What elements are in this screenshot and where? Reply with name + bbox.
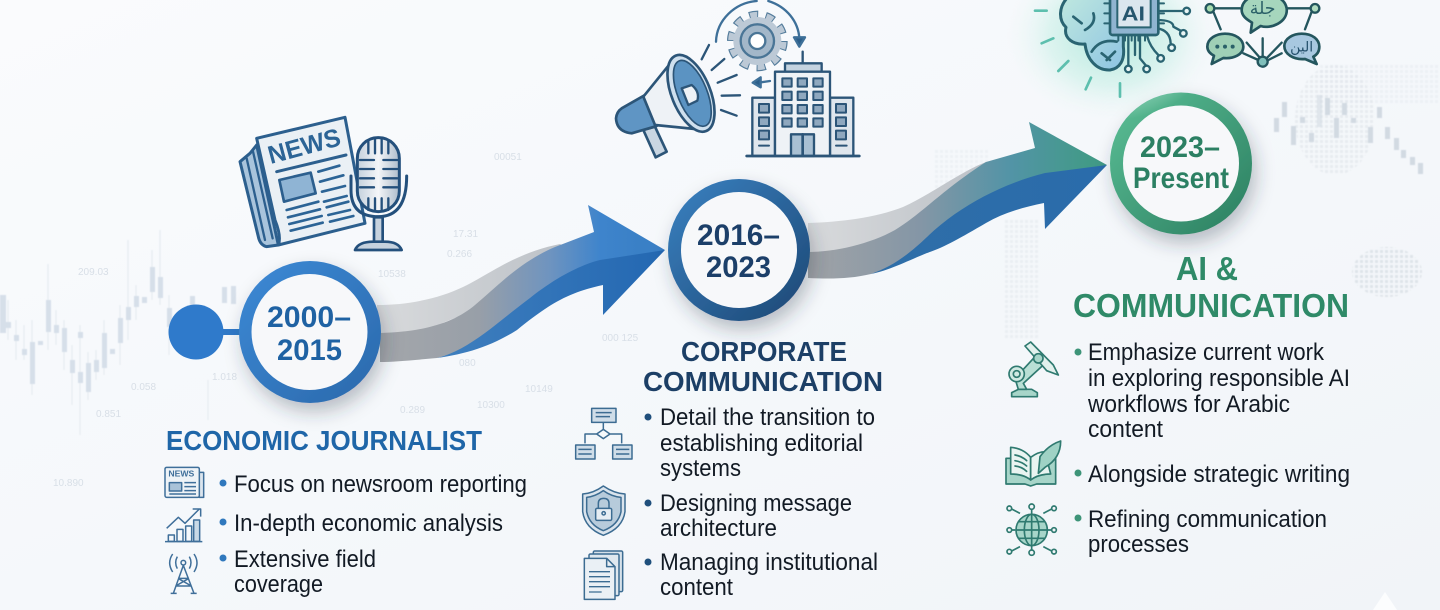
icon: document stack (584, 551, 623, 599)
icon: glow rays (1035, 11, 1120, 97)
icon: news page (165, 467, 204, 497)
icon: cycle arrows (716, 1, 805, 87)
icon: robot arm with pen (1009, 342, 1058, 397)
icon: news page: NEWS (168, 470, 195, 479)
heading: AI and communication: COMMUNICATION (1073, 287, 1349, 324)
faint market numbers: 10.890 (53, 478, 84, 489)
bullet: field coverage: coverage (234, 571, 323, 598)
arrow 2 lower gray-teal band (808, 122, 1107, 279)
icon: glow behind AI brain (1007, 0, 1217, 120)
icon: network globe (1007, 504, 1056, 555)
faint market numbers: 209.03 (78, 267, 109, 278)
icon: AI brain and chip: AI (1122, 3, 1145, 26)
panel: corporate communication (576, 336, 883, 601)
arrow 1 blue band (437, 250, 665, 358)
speech bubble: dots (1207, 34, 1243, 64)
years 2000–2015: 2015 (277, 334, 342, 367)
bullet: institutional content: Managing institutional (660, 549, 878, 576)
faint market numbers: 0.058 (131, 382, 156, 393)
arrow 1 lower gray-blue band (380, 205, 665, 362)
heading: corporate communication: COMMUNICATION (643, 366, 883, 397)
icon: workflow chart (576, 408, 632, 459)
faint market numbers: 10300 (477, 400, 505, 411)
icon: shield with lock (583, 486, 625, 535)
bullet: communication processes: processes (1088, 531, 1189, 558)
background market chart: left (0, 230, 236, 435)
panel: AI and communication (1006, 250, 1350, 558)
heading: AI and communication: AI & (1176, 250, 1238, 287)
icon: megaphone (616, 45, 740, 157)
faint market numbers: 080 (459, 358, 476, 369)
bullet: field coverage: Extensive field (234, 546, 376, 573)
bullet: message architecture: Designing message (660, 490, 852, 517)
icon: Arabic chat network (1206, 0, 1319, 67)
years 2016–2023: 2023 (706, 251, 771, 284)
years 2023–Present: 2023– (1140, 131, 1220, 164)
icon: growth chart (165, 509, 202, 542)
icon: megaphone, gear and building (616, 1, 859, 157)
arrow 2 upper gray band (808, 162, 990, 260)
milestone 2000–2015 (239, 261, 381, 403)
bullet: message architecture: architecture (660, 515, 777, 542)
heading: economic journalist: ECONOMIC JOURNALIST (166, 425, 482, 456)
faint market numbers: 1.018 (212, 372, 237, 383)
icon: newspaper and microphone (240, 117, 407, 250)
icon: Arabic chat network: الين (1290, 40, 1313, 56)
bullet: newsroom reporting: Focus on newsroom reporting (234, 471, 527, 498)
speech bubble: Arabic word (1284, 34, 1319, 64)
bullet: responsible AI workflows: in exploring responsible AI (1088, 365, 1350, 392)
faint market numbers: 00051 (494, 152, 522, 163)
milestone 2023–Present (1110, 92, 1252, 234)
faint market numbers: 0.289 (400, 405, 425, 416)
icon: AI chip (1110, 0, 1158, 35)
faint market numbers (53, 152, 639, 489)
bullet: responsible AI workflows: workflows for Arabic (1087, 391, 1290, 418)
heading: corporate communication: CORPORATE (681, 336, 847, 367)
icon: AI brain and chip (1035, 0, 1190, 97)
bullet: editorial systems: Detail the transition to (660, 404, 875, 431)
bullet: institutional content: content (660, 574, 733, 601)
faint market numbers: 000 125 (602, 333, 639, 344)
icon: radio tower (170, 554, 197, 593)
bullet: institutional content (644, 549, 878, 601)
speech bubble: Arabic word (1242, 0, 1287, 33)
icon: brain (1061, 0, 1124, 70)
faint market numbers: 10149 (525, 384, 553, 395)
corner sparkle (1373, 592, 1397, 610)
bullet: responsible AI workflows: content (1088, 416, 1163, 443)
icon: newspaper and microphone: NEWS (265, 124, 344, 170)
icon: circuit traces (1128, 11, 1182, 66)
bullet: editorial systems: systems (660, 455, 741, 482)
icon: open book with feather (1006, 441, 1061, 486)
faint market numbers: 10538 (378, 269, 406, 280)
faint market numbers: 0.266 (447, 249, 472, 260)
faint market numbers: 0.851 (96, 409, 121, 420)
bullet: field coverage (220, 546, 376, 598)
icon: gear (731, 15, 784, 67)
bullet: editorial systems (644, 404, 875, 482)
years 2000–2015: 2000– (267, 301, 351, 334)
bullet: responsible AI workflows (1074, 339, 1350, 443)
bullet: responsible AI workflows: Emphasize current work (1088, 339, 1325, 366)
years 2023–Present: Present (1133, 162, 1229, 195)
years 2016–2023: 2016– (697, 219, 780, 252)
start node and connector (168, 304, 244, 360)
bullet: editorial systems: establishing editorial (660, 430, 863, 457)
ribbon arrow 2 (808, 122, 1107, 279)
panel: economic journalist (165, 425, 527, 598)
bullet: strategic writing: Alongside strategic writing (1088, 461, 1350, 488)
bullet: communication processes: Refining communication (1088, 506, 1327, 533)
background market chart: right (935, 65, 1440, 340)
bullet: economic analysis: In-depth economic analysis (234, 510, 503, 537)
faint market numbers: 17.31 (453, 229, 478, 240)
arrow 1 upper gray band (377, 244, 570, 340)
bullet: communication processes (1074, 506, 1327, 558)
ribbon arrow 1 (377, 205, 665, 362)
milestone 2016–2023 (668, 179, 810, 321)
bullet: message architecture (644, 490, 852, 542)
icon: office building (747, 52, 859, 156)
arrow 2 blue band (871, 165, 1107, 274)
